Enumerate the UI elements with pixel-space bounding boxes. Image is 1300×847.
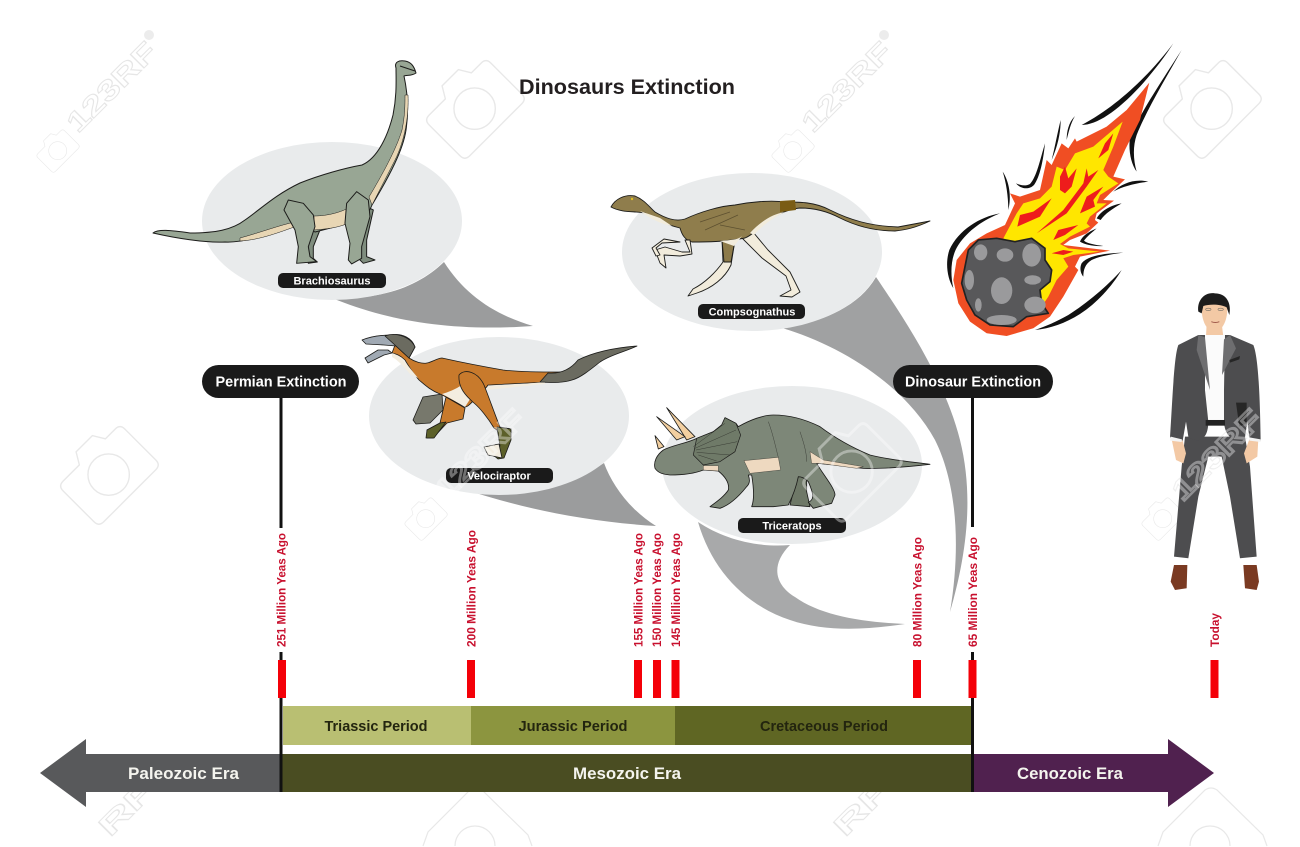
- panel: compsognathus bubble: [611, 173, 967, 612]
- Paleozoic Era arrow: [40, 739, 282, 807]
- man belt: [1206, 420, 1225, 426]
- man hair: [1198, 293, 1230, 315]
- Mesozoic Era bar: [282, 754, 972, 792]
- date labels: 65 Million Yeas Ago: [966, 537, 980, 647]
- panel: brachiosaurus bubble: [153, 61, 533, 328]
- callout tail: compsognathus: [782, 277, 967, 612]
- Cenozoic Era arrow: [972, 739, 1214, 807]
- label: compsognathus: Compsognathus: [709, 306, 795, 318]
- label: brachiosaurus: Brachiosaurus: [293, 276, 371, 288]
- icon: compsognathus: [611, 196, 930, 297]
- timeline: periods: [283, 706, 972, 745]
- panel: triceratops bubble: [655, 386, 930, 629]
- man head: [1202, 302, 1227, 332]
- text: 123RF: [1165, 404, 1268, 506]
- icon: man standing: [1170, 293, 1261, 590]
- icon: brachiosaurus: [153, 61, 416, 264]
- panel: velociraptor bubble: [362, 334, 656, 526]
- bubble: brachiosaurus: [202, 142, 462, 300]
- man face: [1206, 308, 1223, 322]
- date ticks: [278, 660, 1218, 698]
- marker: Permian Extinction: Permian Extinction: [216, 374, 346, 390]
- man trousers: [1174, 437, 1257, 558]
- marker: Dinosaur Extinction: [893, 365, 1053, 792]
- man hands: [1172, 439, 1258, 463]
- bubble: triceratops: [662, 386, 922, 544]
- meteor speed lines: [947, 43, 1182, 330]
- Triassic Period: Triassic Period: [324, 718, 428, 735]
- label: brachiosaurus: [278, 273, 386, 288]
- icon: meteor: [947, 43, 1182, 336]
- callout tail: triceratops: [698, 522, 905, 629]
- date labels: 251 Million Yeas Ago: [274, 533, 288, 647]
- text: RF: [92, 774, 160, 842]
- man shirt: [1205, 335, 1225, 422]
- label: triceratops: Triceratops: [762, 520, 822, 532]
- meteor outer flame: [953, 83, 1149, 336]
- text: 123RF: [1165, 404, 1268, 506]
- date labels: 145 Million Yeas Ago: [669, 533, 683, 647]
- Mesozoic Era bar: Mesozoic Era: [573, 764, 682, 783]
- date labels: 150 Million Yeas Ago: [650, 533, 664, 647]
- marker: Permian Extinction: [202, 365, 359, 792]
- Cenozoic Era arrow: Cenozoic Era: [1017, 764, 1124, 783]
- man cuffs: [1170, 437, 1261, 442]
- meteor yellow flame: [1003, 122, 1123, 307]
- label: compsognathus: [698, 304, 805, 319]
- meteor craters: [965, 243, 1046, 325]
- label: velociraptor: [446, 468, 553, 483]
- Triassic Period: [283, 706, 471, 745]
- callout tail: brachiosaurus: [332, 262, 533, 328]
- meteor rock: [962, 238, 1052, 327]
- date labels: 80 Million Yeas Ago: [910, 537, 924, 647]
- Paleozoic Era arrow: Paleozoic Era: [128, 764, 240, 783]
- title: Dinosaurs Extinction: [519, 76, 735, 99]
- callout tail: velociraptor: [476, 463, 656, 526]
- date labels: Today: [1208, 613, 1222, 647]
- text: 123RF: [60, 36, 163, 138]
- icon: velociraptor: [362, 334, 637, 459]
- marker: Dinosaur Extinction: Dinosaur Extinction: [905, 374, 1041, 390]
- man pockets: [1229, 356, 1247, 427]
- text: RF: [827, 774, 895, 842]
- date labels: [274, 530, 1222, 647]
- Jurassic Period: Jurassic Period: [518, 718, 628, 735]
- Jurassic Period: [471, 706, 675, 745]
- text: 123RF: [795, 36, 898, 138]
- icon: triceratops: [655, 408, 930, 508]
- date labels: 200 Million Yeas Ago: [464, 530, 478, 647]
- man shoes: [1171, 565, 1259, 590]
- label: velociraptor: Velociraptor: [467, 470, 532, 482]
- meteor inner flames: [1017, 133, 1113, 255]
- bubble: velociraptor: [369, 337, 629, 495]
- date labels: 155 Million Yeas Ago: [632, 533, 646, 647]
- man lapels: [1197, 335, 1236, 390]
- bubble: compsognathus: [622, 173, 882, 331]
- man neck: [1206, 323, 1223, 345]
- label: triceratops: [738, 518, 846, 533]
- timeline: eras: [40, 739, 1214, 807]
- man jacket: [1170, 335, 1261, 441]
- Cretaceous Period: Cretaceous Period: [760, 718, 888, 735]
- Cretaceous Period: [675, 706, 972, 745]
- text: 123RF: [428, 404, 531, 506]
